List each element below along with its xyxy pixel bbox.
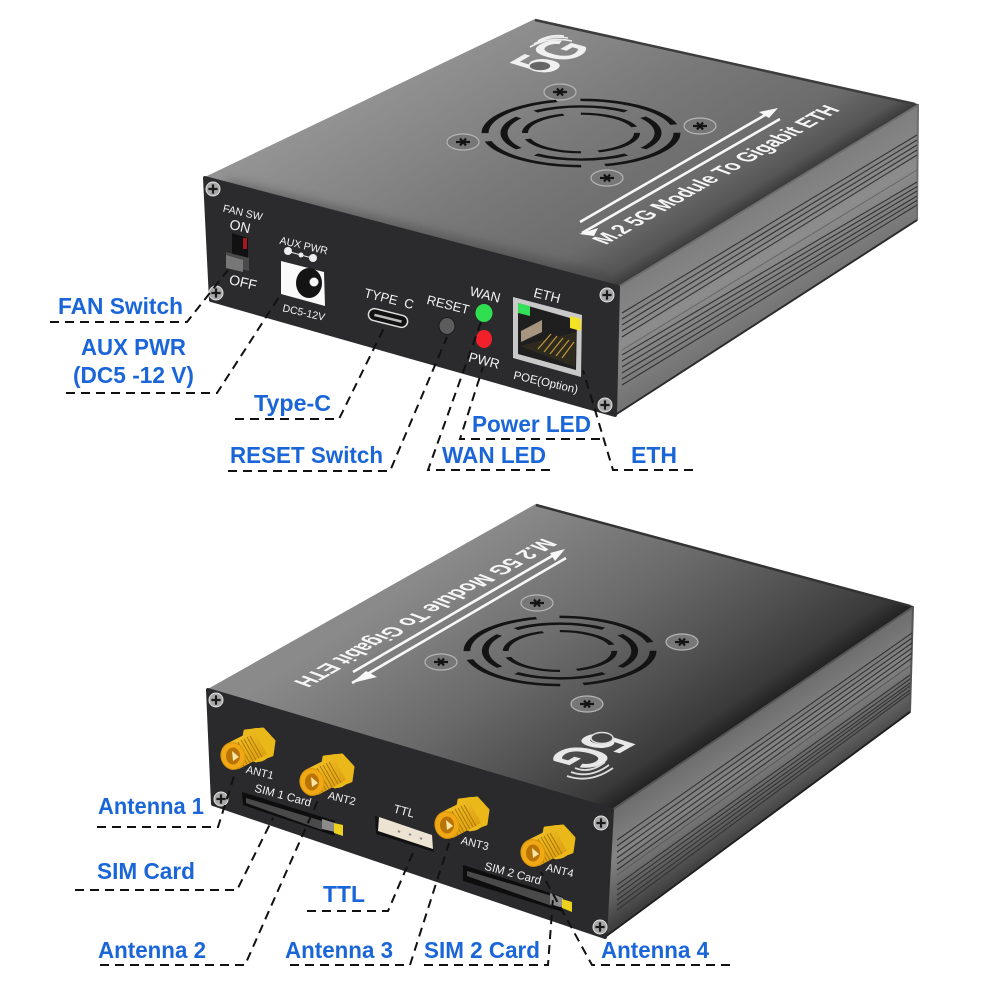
- callout: Antenna 2: Antenna 2: [98, 937, 206, 963]
- reset button: [425, 292, 471, 334]
- side face with heat-sink fins: [605, 607, 913, 937]
- top screws: [425, 595, 698, 712]
- TTL connector: TTL: [392, 802, 416, 821]
- callout: Antenna 1: Antenna 1: [98, 793, 204, 819]
- SIM 1 slot: [242, 783, 343, 836]
- fan switch: [222, 203, 264, 293]
- callout: ETH: [583, 370, 693, 470]
- SIM 2 slot: [463, 861, 572, 912]
- callout: FAN Switch: [50, 270, 228, 322]
- corner screws: [209, 693, 608, 934]
- callout: Antenna 3: Antenna 3: [285, 937, 393, 963]
- ETH port: ETH: [532, 285, 562, 306]
- callout: ETH: ETH: [631, 442, 677, 468]
- callout: TTL: TTL: [323, 881, 365, 907]
- POE label: POE(Option): [512, 370, 579, 396]
- callout: Antenna 4: [541, 872, 730, 965]
- power LED: PWR: [467, 350, 501, 372]
- corner screws: [206, 182, 614, 412]
- callout: Type-C: [235, 326, 385, 419]
- callout: Antenna 1: [97, 773, 235, 827]
- callout: Antenna 4: Antenna 4: [601, 937, 709, 963]
- TTL connector: [375, 802, 434, 852]
- front face: [205, 178, 618, 415]
- side face with heat-sink fins: [615, 105, 918, 415]
- callout: TTL: [307, 848, 415, 911]
- top screws: [447, 84, 716, 186]
- callout: RESET Switch: [228, 337, 447, 471]
- antenna connector 4: [518, 825, 575, 880]
- callout: AUX PWR: (DC5 -12 V): [73, 362, 194, 388]
- device: front view: [205, 20, 918, 415]
- ETH port: [513, 285, 582, 377]
- callout: SIM 2 Card: [424, 898, 553, 965]
- callout: Antenna 2: [98, 798, 319, 965]
- callout: RESET Switch: RESET Switch: [230, 442, 383, 468]
- callout: WAN LED: [428, 322, 550, 470]
- icon: fan vent: [485, 100, 677, 166]
- icon: 5G logo: 5G: [495, 33, 606, 78]
- callout: FAN Switch: FAN Switch: [58, 293, 183, 319]
- Type-C port: TYPE C: [363, 285, 415, 312]
- power LED: [467, 330, 501, 372]
- antenna connector 2: [297, 754, 357, 808]
- top face: [208, 505, 913, 810]
- antenna connector 2: ANT2: [327, 790, 357, 808]
- antenna connector 3: [432, 797, 490, 853]
- fan switch: FAN SW: [222, 203, 264, 223]
- icon: 5G logo: 5G: [531, 727, 652, 776]
- antenna connector 1: [218, 728, 275, 782]
- callout: Type-C: Type-C: [254, 390, 331, 416]
- DC power jack: [278, 235, 329, 324]
- WAN LED: [468, 284, 502, 322]
- icon: fan vent: [467, 617, 653, 685]
- callout: Power LED: Power LED: [472, 411, 591, 437]
- Type-C port: [363, 285, 415, 329]
- callout: AUX PWR: [66, 294, 281, 393]
- product name and arrows: M.2 5G Module To Gigabit ETH: [586, 102, 846, 247]
- SIM 2 slot: SIM 2 Card: [483, 861, 542, 887]
- WAN LED: WAN: [468, 284, 502, 306]
- callout: Power LED: [460, 367, 600, 439]
- DC power jack: DC5-12V: [281, 302, 326, 324]
- top face: [205, 20, 918, 287]
- callout: AUX PWR: AUX PWR: [81, 334, 186, 360]
- callout: WAN LED: WAN LED: [442, 442, 546, 468]
- callout: Antenna 3: [285, 843, 449, 965]
- DC power jack: AUX PWR: [278, 235, 329, 258]
- callout: SIM Card: SIM Card: [97, 858, 195, 884]
- callout: SIM 2 Card: SIM 2 Card: [424, 937, 540, 963]
- antenna connector 4: ANT4: [545, 862, 575, 880]
- fan switch: ON: [228, 216, 252, 236]
- antenna connector 1: ANT1: [245, 764, 275, 782]
- callout: SIM Card: [75, 818, 273, 890]
- device: rear view: [208, 505, 913, 937]
- product name and arrows: M.2 5G Module To Gigabit ETH: [287, 536, 563, 690]
- reset button: RESET: [425, 292, 471, 317]
- fan switch: OFF: [228, 271, 259, 293]
- front face: [208, 690, 612, 937]
- SIM 1 slot: SIM 1 Card: [253, 783, 312, 809]
- antenna connector 3: ANT3: [460, 835, 490, 853]
